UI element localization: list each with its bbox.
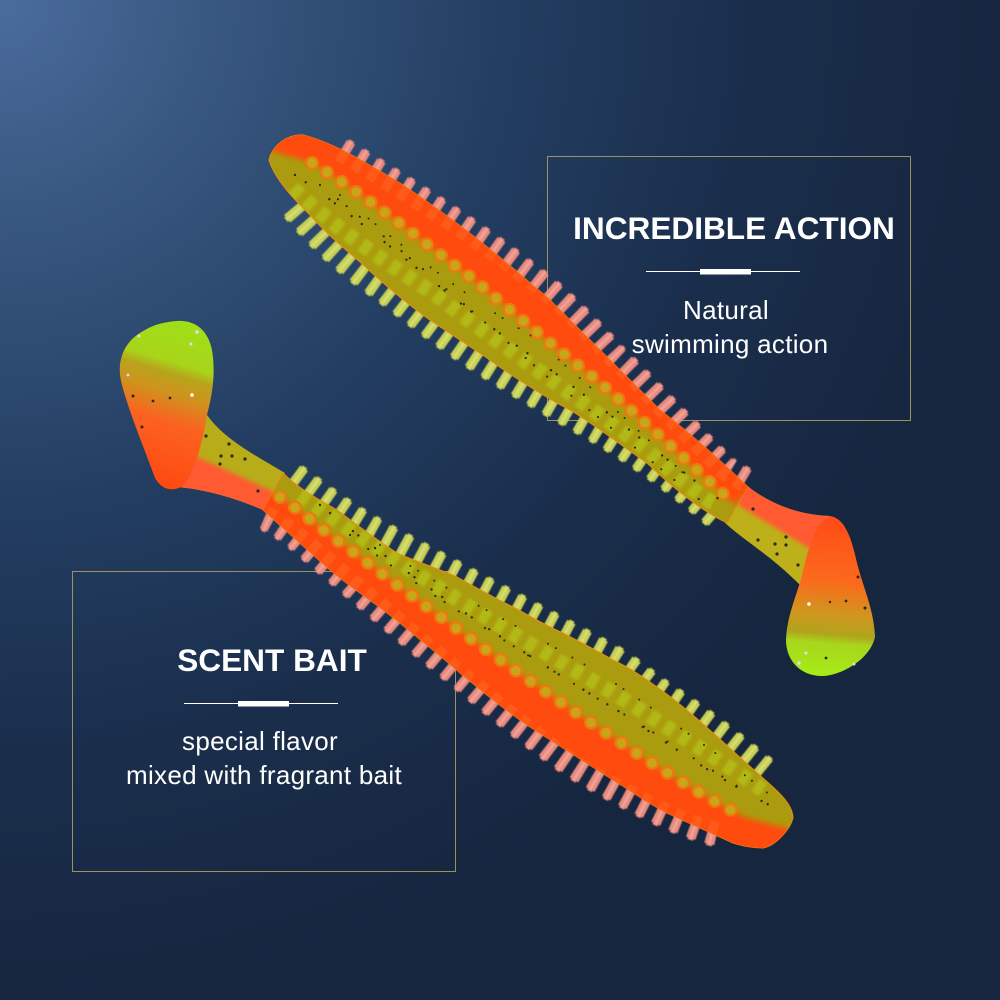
row of bumps: [280, 497, 747, 818]
row of bumps: [312, 163, 735, 505]
body orange band and details: [272, 135, 748, 510]
body: [263, 473, 793, 848]
lower ribs: [296, 205, 722, 517]
inner upper ribs: [300, 495, 763, 790]
divider: scent bait: [184, 701, 338, 706]
text: special flavor mixed with fragrant bait: special flavor: [182, 726, 338, 756]
panel: scent bait frame: [72, 572, 456, 872]
body orange band and details: [263, 490, 790, 848]
text: special flavor mixed with fragrant bait: [126, 726, 402, 790]
black specks: [320, 505, 775, 808]
inner lower ribs: [293, 188, 713, 503]
divider: incredible action: [646, 269, 800, 274]
lure: top soft bait: [262, 90, 875, 676]
orange band nubs: [266, 514, 726, 832]
upper ribs: [291, 478, 763, 773]
tail fin specks: [127, 330, 260, 493]
orange band nubs: [339, 153, 747, 486]
text: natural swimming action: swimming action: [632, 329, 828, 359]
tail connector: [180, 415, 285, 510]
text: special flavor mixed with fragrant bait: mixed with fragrant bait: [126, 760, 402, 790]
tail fin: [786, 516, 875, 676]
text: natural swimming action: Natural: [683, 295, 769, 325]
upper ribs: [339, 153, 747, 486]
heading: incredible action: INCREDIBLE ACTION: [573, 210, 895, 246]
tail fin specks: [751, 507, 866, 666]
panel: incredible action frame: [548, 156, 910, 420]
lower ribs: [266, 514, 726, 832]
black specks: [295, 175, 720, 500]
body: [269, 135, 748, 523]
heading: scent bait: SCENT BAIT: [177, 642, 367, 678]
lure: bottom soft bait: [120, 321, 810, 875]
tail fin: [120, 321, 214, 489]
tail connector: [725, 484, 830, 584]
text: natural swimming action: [632, 295, 828, 359]
